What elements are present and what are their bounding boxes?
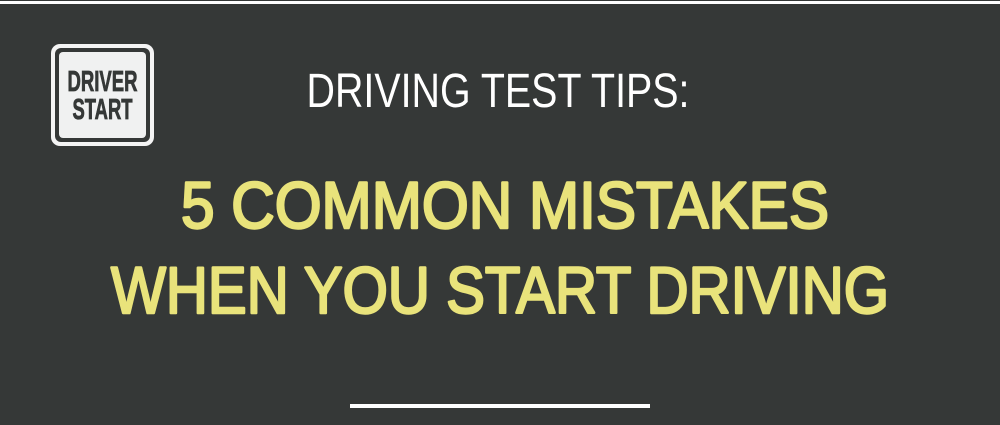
- logo: driver start: DRIVER: [68, 66, 138, 98]
- logo: driver start: START: [72, 94, 133, 126]
- title: when you start driving: WHEN YOU START DRIVING: [111, 253, 889, 327]
- title: 5 common mistakes: 5 COMMON MISTAKES: [181, 168, 829, 242]
- logo: driver start: [51, 44, 154, 146]
- heading: driving test tips: DRIVING TEST TIPS:: [306, 65, 690, 118]
